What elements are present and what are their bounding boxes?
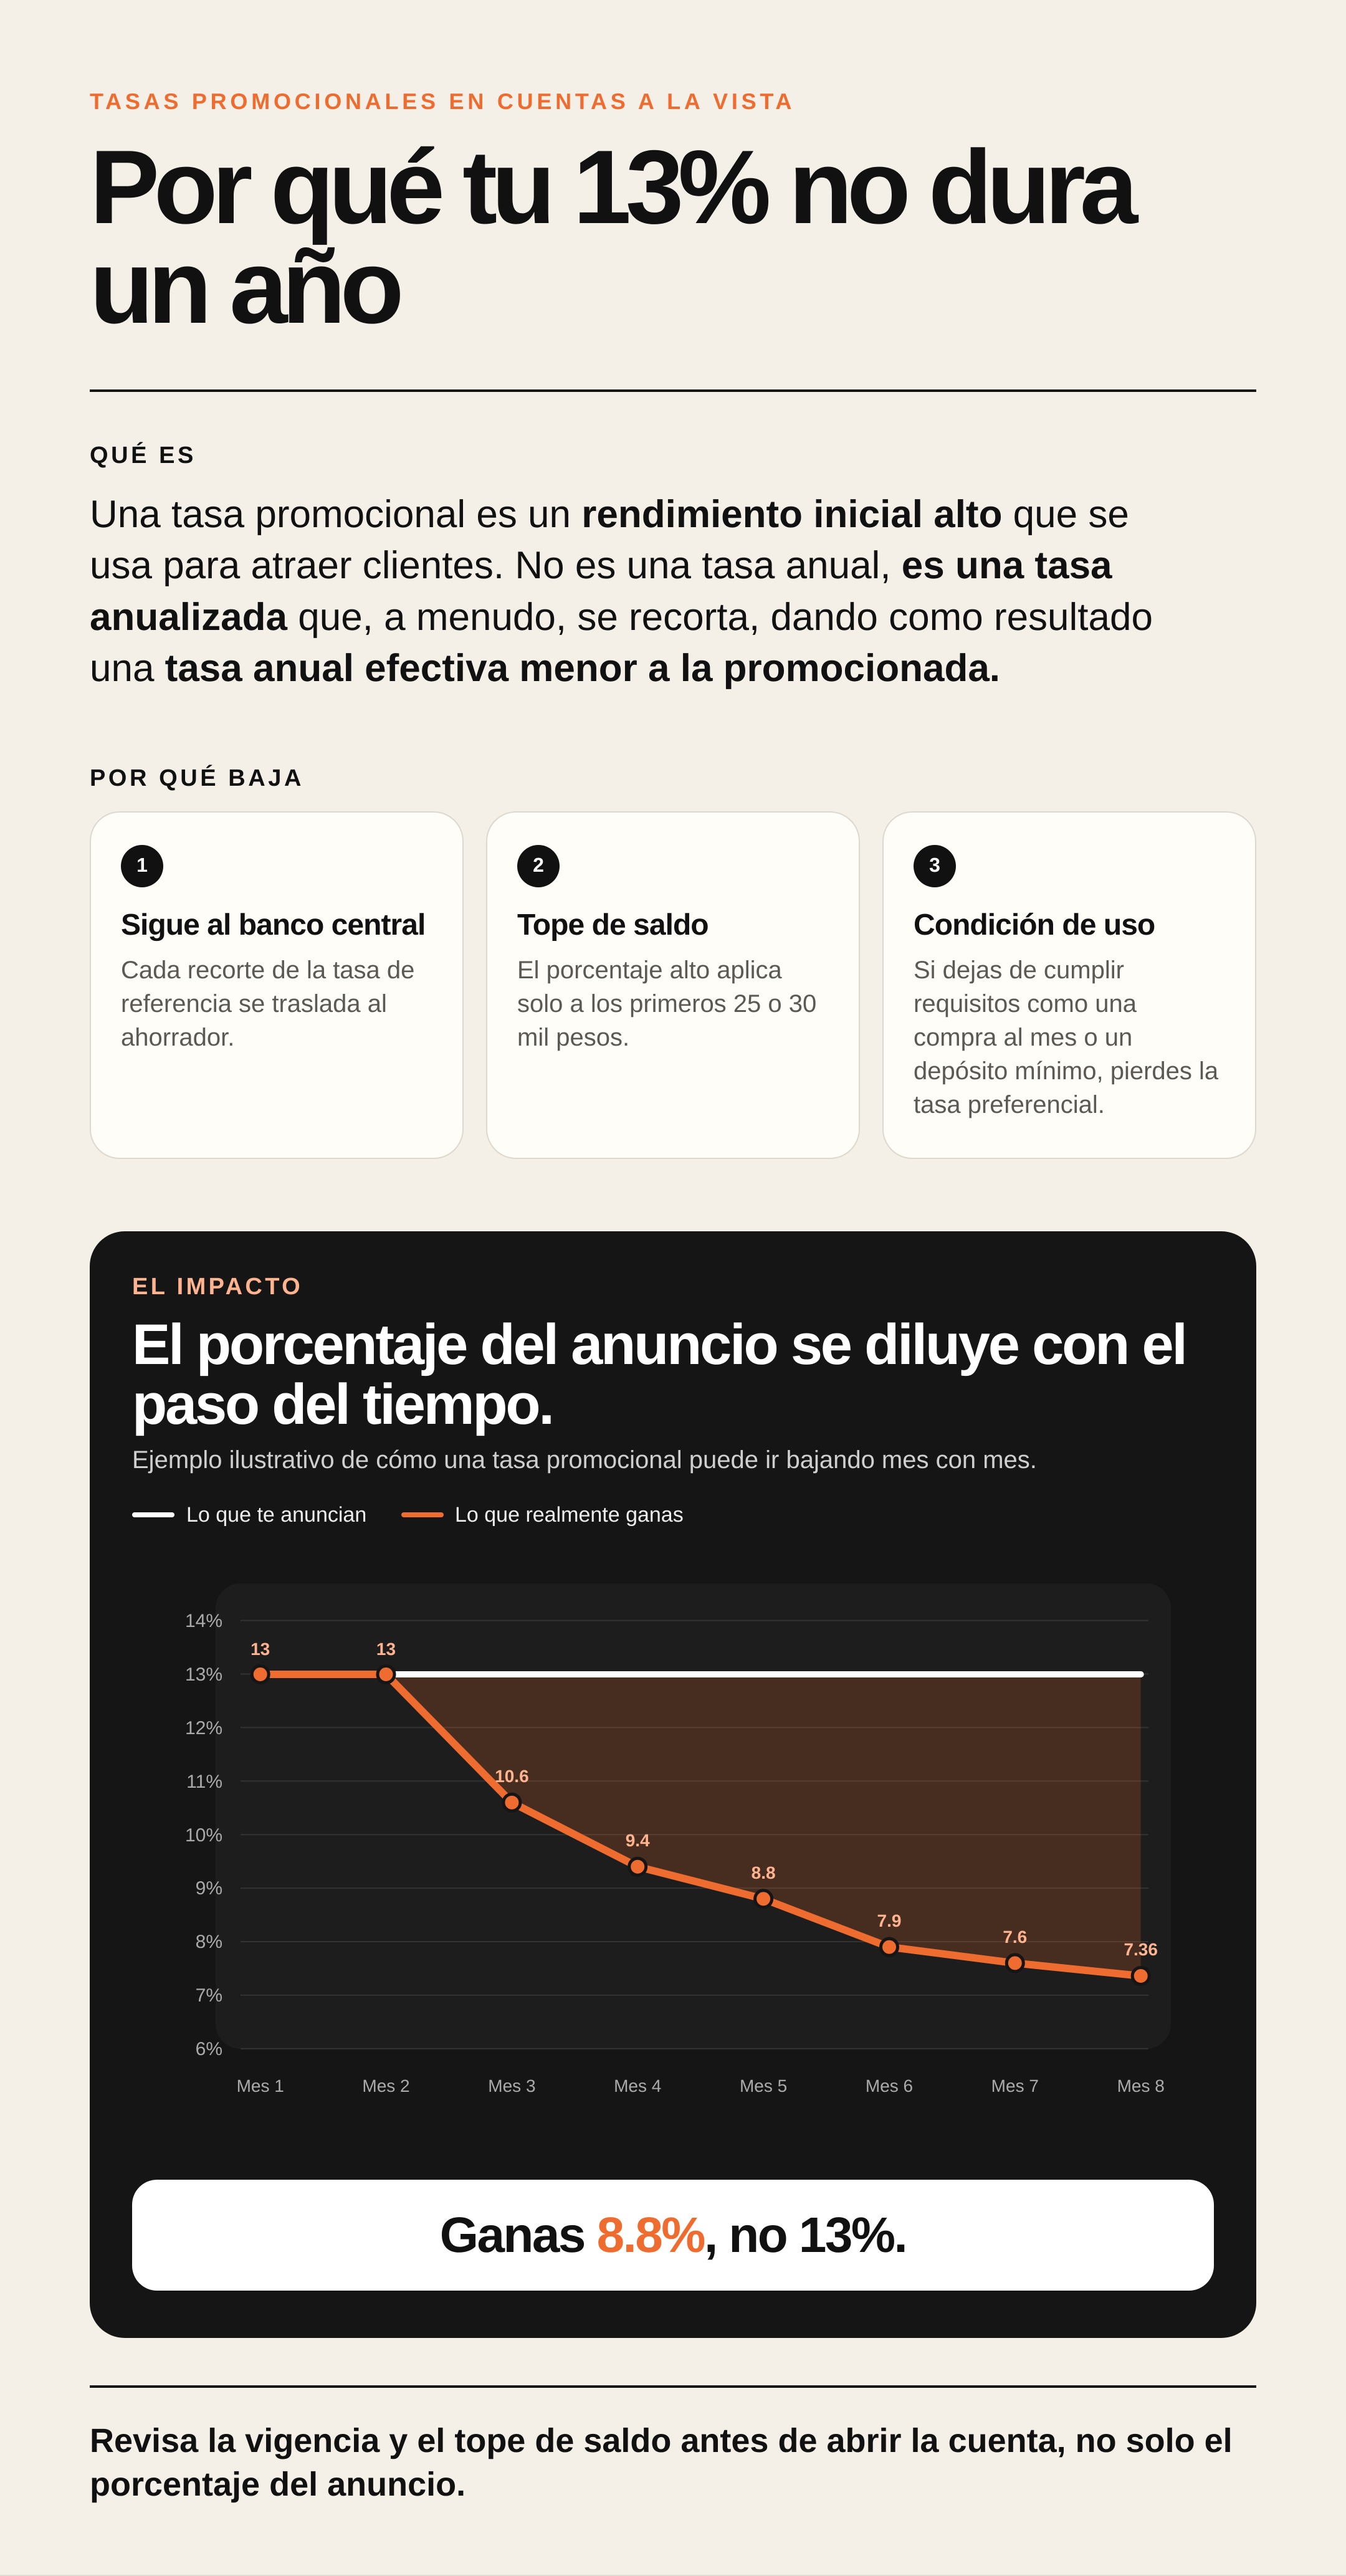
legend label: ganas: Lo que realmente ganas xyxy=(455,1503,684,1527)
definition text: Una tasa promocional es un rendimiento inicial alto que se xyxy=(90,493,1129,536)
card 3 text: tasa preferencial. xyxy=(914,1091,1105,1119)
number badge 3: 3 xyxy=(929,854,940,876)
data value labels: 10.6 xyxy=(495,1767,529,1786)
x axis labels xyxy=(237,2076,1165,2096)
card 3 text: depósito mínimo, pierdes la xyxy=(914,1057,1218,1085)
card 2: tope de saldo xyxy=(486,811,860,1159)
y axis labels: 10% xyxy=(185,1825,222,1846)
x axis labels: Mes 1 xyxy=(237,2076,284,2096)
card 3 heading: Condición de uso xyxy=(914,909,1155,942)
x axis labels: Mes 2 xyxy=(362,2076,410,2096)
data points xyxy=(252,1666,1149,1984)
y axis labels: 6% xyxy=(196,2039,222,2059)
legend swatch: orange xyxy=(401,1512,444,1517)
number badge 2: 2 xyxy=(533,854,544,876)
x axis labels: Mes 6 xyxy=(866,2076,913,2096)
card 1: banco central xyxy=(90,811,464,1159)
data value labels: 7.9 xyxy=(877,1911,901,1930)
y axis labels: 9% xyxy=(196,1878,222,1899)
x axis labels: Mes 7 xyxy=(991,2076,1039,2096)
data value labels: 13 xyxy=(251,1639,270,1659)
title: Por qué tu 13% no dura xyxy=(90,128,1132,246)
closing note: Revisa la vigencia y el tope de saldo antes de abrir la cuenta, no solo el xyxy=(90,2422,1233,2459)
callout text: Ganas 8.8%, no 13%. xyxy=(440,2207,906,2263)
title: un año xyxy=(90,228,398,345)
panel heading xyxy=(132,1313,1186,1436)
advertised rate line xyxy=(260,1671,1141,1677)
card 2 text xyxy=(517,956,816,1051)
number badge 3 xyxy=(914,845,956,887)
x axis labels: Mes 5 xyxy=(740,2076,787,2096)
closing note xyxy=(90,2422,1233,2503)
panel heading: paso del tiempo. xyxy=(132,1373,553,1436)
y axis labels: 11% xyxy=(186,1772,222,1792)
legend xyxy=(132,1503,684,1527)
definition text xyxy=(90,493,1153,690)
card 3 text: Si dejas de cumplir xyxy=(914,956,1124,984)
panel heading: El porcentaje del anuncio se diluye con el xyxy=(132,1313,1186,1376)
kicker: TASAS PROMOCIONALES EN CUENTAS A LA VISTA xyxy=(90,88,795,114)
card 2 heading: Tope de saldo xyxy=(517,909,709,942)
card 3 text: compra al mes o un xyxy=(914,1024,1132,1051)
card 2 text: solo a los primeros 25 o 30 xyxy=(517,990,816,1018)
card 2 text: El porcentaje alto aplica xyxy=(517,956,782,984)
card 1 text xyxy=(121,956,414,1051)
legend label: anuncian: Lo que te anuncian xyxy=(186,1503,366,1527)
card 3 text: requisitos como una xyxy=(914,990,1137,1018)
data value labels: 8.8 xyxy=(752,1863,776,1882)
number badge 1 xyxy=(121,845,163,887)
number badge 1: 1 xyxy=(136,854,148,876)
closing note: porcentaje del anuncio. xyxy=(90,2466,465,2503)
real rate line xyxy=(260,1674,1141,1976)
number badge 2 xyxy=(517,845,560,887)
data value labels: 7.6 xyxy=(1003,1927,1027,1947)
section label: por qué baja: POR QUÉ BAJA xyxy=(90,765,304,791)
y axis labels: 14% xyxy=(185,1611,222,1631)
legend swatch: white xyxy=(132,1512,174,1517)
card 1 text: Cada recorte de la tasa de xyxy=(121,956,414,984)
y axis labels: 13% xyxy=(185,1664,222,1685)
y axis labels xyxy=(185,1611,222,2059)
card 1 text: referencia se traslada al xyxy=(121,990,387,1018)
card 3: condición de uso xyxy=(882,811,1256,1159)
x axis labels: Mes 4 xyxy=(614,2076,661,2096)
data value labels: 7.36 xyxy=(1124,1940,1158,1959)
panel eyebrow: EL IMPACTO xyxy=(132,1274,303,1300)
line chart xyxy=(185,1611,1165,2096)
card 1 heading: Sigue al banco central xyxy=(121,909,425,942)
panel: el impacto xyxy=(90,1231,1256,2338)
y axis labels: 8% xyxy=(196,1932,222,1952)
gap area between advertised and real rate xyxy=(386,1674,1141,1976)
definition text: usa para atraer clientes. No es una tasa anual, es una tasa xyxy=(90,544,1112,587)
title xyxy=(90,128,1139,345)
y axis labels: 7% xyxy=(196,1985,222,2006)
section label: qué es: QUÉ ES xyxy=(90,442,196,469)
card 1 text: ahorrador. xyxy=(121,1024,234,1051)
definition text: anualizada que, a menudo, se recorta, dando como resultado xyxy=(90,596,1153,639)
callout xyxy=(132,2180,1214,2291)
panel subheading: Ejemplo ilustrativo de cómo una tasa promocional puede ir bajando mes con mes. xyxy=(132,1446,1037,1474)
card 3 text xyxy=(914,956,1219,1119)
card 2 text: mil pesos. xyxy=(517,1024,629,1051)
definition text: una tasa anual efectiva menor a la promocionada. xyxy=(90,647,1000,690)
data value labels: 13 xyxy=(376,1639,396,1659)
x axis labels: Mes 3 xyxy=(488,2076,536,2096)
data value labels xyxy=(251,1639,1158,1959)
x axis labels: Mes 8 xyxy=(1117,2076,1165,2096)
data value labels: 9.4 xyxy=(626,1831,650,1850)
plot background xyxy=(216,1583,1171,2049)
y axis labels: 12% xyxy=(185,1718,222,1739)
